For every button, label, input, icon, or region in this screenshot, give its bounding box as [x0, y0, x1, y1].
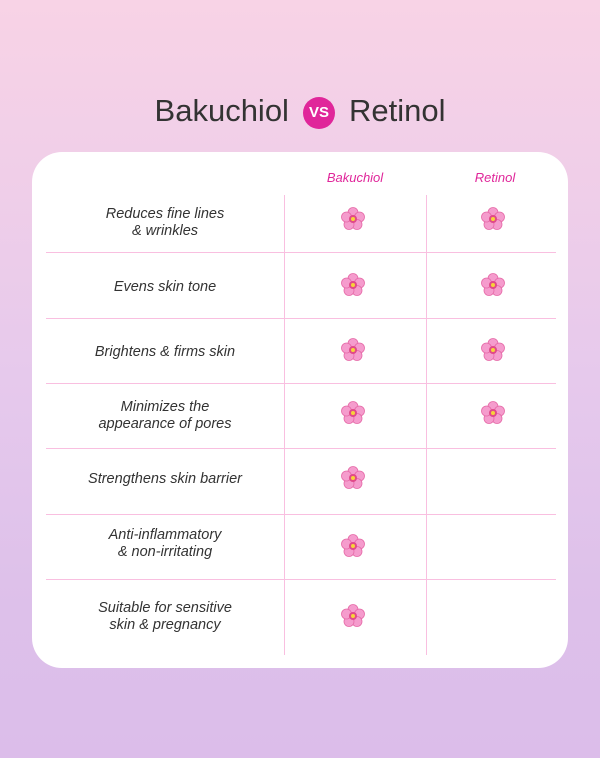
label row 4	[98, 399, 232, 432]
label row 1	[106, 206, 224, 239]
header: Retinol: Retinol	[475, 170, 515, 185]
label row 6: & non-irritating	[118, 544, 212, 560]
label row 4: Minimizes the	[121, 399, 209, 415]
label row 4: appearance of pores	[98, 416, 232, 432]
label row 6: Anti-inflammatory	[109, 527, 221, 543]
label row 6	[108, 527, 222, 560]
label row 7: Suitable for sensitive	[98, 600, 232, 616]
label row 3: Brightens & firms skin	[95, 344, 235, 360]
panel: comparison card	[32, 152, 568, 668]
label row 7: skin & pregnancy	[109, 617, 221, 633]
header: Bakuchiol: Bakuchiol	[327, 170, 383, 185]
title: Bakuchiol Retinol	[155, 93, 445, 128]
label row 5: Strengthens skin barrier	[88, 471, 242, 487]
label row 1: Reduces fine lines	[106, 206, 224, 222]
label row 7	[98, 600, 232, 633]
label row 1: & wrinkles	[132, 223, 198, 239]
title: VS	[309, 104, 329, 121]
label row 2: Evens skin tone	[114, 279, 216, 295]
icons: flowers	[341, 207, 505, 627]
